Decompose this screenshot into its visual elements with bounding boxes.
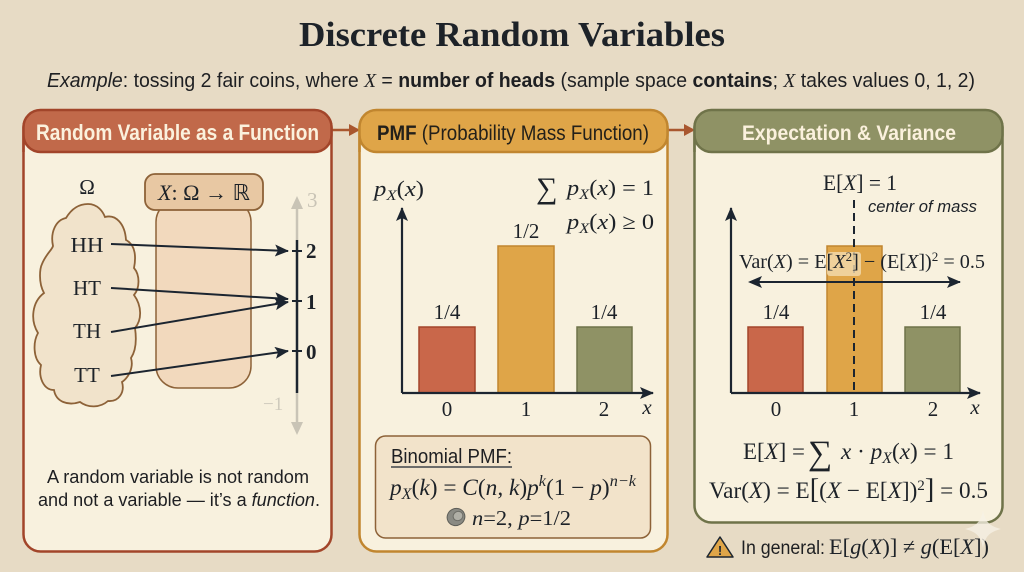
normalisation formulas: ( xyxy=(589,175,597,200)
variance definition formula: ] xyxy=(925,474,934,505)
panel: random variable as a function xyxy=(24,110,332,552)
number line: 0 xyxy=(306,340,316,364)
warning note: In general: xyxy=(741,538,825,559)
panel 1 header xyxy=(24,110,332,152)
expectation formula xyxy=(743,435,954,472)
arrow: panel 2 to panel 3 xyxy=(668,129,693,131)
outcome labels: HT xyxy=(73,276,101,300)
expectation formula: x) = 1 xyxy=(900,439,954,464)
sparkle watermark xyxy=(965,510,1001,548)
bar chart: distribution: 1 xyxy=(849,397,859,421)
bar chart: PMF xyxy=(402,208,653,421)
expectation formula: X xyxy=(881,450,893,467)
warning note xyxy=(707,534,989,559)
omega label: Ω xyxy=(79,175,95,199)
expectation formula: ∑ xyxy=(808,435,832,472)
y axis label: ( xyxy=(397,176,405,201)
binomial PMF box: ( xyxy=(412,475,419,500)
binomial PMF box: p xyxy=(390,475,402,500)
outcome labels xyxy=(70,233,104,387)
normalisation formulas: p xyxy=(567,209,578,234)
variance definition formula: = 0.5 xyxy=(940,478,988,503)
outcome labels: HH xyxy=(70,233,104,257)
caption: A random variable is not random xyxy=(47,467,309,487)
caption: and not a variable — it’s a function. xyxy=(38,490,320,510)
normalisation formulas: X xyxy=(578,221,590,237)
bar chart: PMF: 1/4 xyxy=(591,300,618,324)
y axis label: p xyxy=(374,176,385,201)
binomial PMF box: k) = C(n, k)p xyxy=(419,475,539,500)
function label: X: Ω → ℝ xyxy=(157,180,251,205)
panel: PMF xyxy=(360,110,668,552)
bar chart: distribution: 1/4 xyxy=(920,300,947,324)
function box xyxy=(156,200,251,388)
binomial PMF box: (1 − xyxy=(546,475,590,500)
warning note: E[g(X)] ≠ g(E[X]) xyxy=(829,534,989,559)
spread arrow xyxy=(750,281,960,283)
variance formula: X]) xyxy=(906,251,932,273)
bar chart: PMF: 1/4 xyxy=(434,300,461,324)
panel 3 header xyxy=(694,110,1002,152)
bar chart: PMF: 1 xyxy=(521,397,531,421)
binomial PMF box xyxy=(376,436,650,538)
normalisation formulas xyxy=(536,172,654,237)
bar chart: distribution xyxy=(731,200,980,421)
variance formula: 2 xyxy=(932,249,938,264)
outcome labels: TT xyxy=(74,363,100,387)
number line: −1 xyxy=(263,394,283,415)
normalisation formulas: p xyxy=(567,175,578,200)
panel 3 header: Expectation & Variance xyxy=(742,122,956,145)
binomial PMF box: n−k xyxy=(610,473,637,490)
variance formula: 2 xyxy=(846,249,852,264)
normalisation formulas: x) = 1 xyxy=(597,175,650,200)
bar chart: PMF: 1/2 xyxy=(513,219,539,243)
binomial PMF box: p) xyxy=(590,475,610,500)
variance formula: ] − (E[ xyxy=(852,251,906,273)
caption xyxy=(38,467,320,510)
bar chart: distribution: x xyxy=(969,395,980,419)
number line xyxy=(263,188,318,435)
bar chart: PMF: x xyxy=(641,395,652,419)
icon: warning triangle xyxy=(707,537,733,558)
subtitle: Example: tossing 2 fair coins, where X = number of heads (sample space contains; X takes values 0, 1, 2) xyxy=(47,70,975,92)
arrow: panel 1 to panel 2 xyxy=(332,129,358,131)
variance definition formula: 2 xyxy=(917,478,925,494)
bar chart: PMF: 2 xyxy=(599,397,609,421)
icon: warning triangle: ! xyxy=(718,543,722,558)
bar chart: distribution: 0 xyxy=(771,397,781,421)
binomial PMF box: X xyxy=(401,486,413,503)
bar chart: PMF: 0 xyxy=(442,397,452,421)
panel 2 header: PMF (Probability Mass Function) xyxy=(377,122,649,145)
title: Discrete Random Variables xyxy=(299,15,725,54)
variance definition formula: Var(X) = E[(X − E[X]) xyxy=(709,474,917,505)
panel 2 header xyxy=(360,110,668,152)
y axis label: X xyxy=(385,188,398,204)
outcome labels: TH xyxy=(73,319,101,343)
variance formula: = 0.5 xyxy=(938,251,985,273)
icon: coin xyxy=(444,505,468,529)
panel: expectation and variance xyxy=(694,110,1002,522)
number line: 1 xyxy=(306,290,316,314)
normalisation formulas: x) ≥ 0 xyxy=(597,209,650,234)
variance formula xyxy=(739,249,985,276)
expectation formula: ( xyxy=(892,439,900,464)
normalisation formulas: ( xyxy=(589,209,597,234)
expectation formula: x · p xyxy=(841,439,882,464)
binomial PMF box: k xyxy=(539,473,547,490)
expectation label: E[X] = 1 xyxy=(823,170,897,195)
number line: 2 xyxy=(306,239,316,263)
binomial PMF box: n=2, p=1/2 xyxy=(472,506,571,530)
panel 1 header: Random Variable as a Function xyxy=(36,120,319,145)
center of mass note: center of mass xyxy=(868,197,977,216)
bar chart: distribution: 1/4 xyxy=(763,300,790,324)
cloud: sample space xyxy=(33,204,140,406)
binomial PMF box: Binomial PMF: xyxy=(391,446,512,468)
bar chart: distribution: 2 xyxy=(928,397,938,421)
expectation formula: E[X] = xyxy=(743,439,805,464)
function label xyxy=(145,174,263,210)
normalisation formulas: ∑ xyxy=(536,172,557,205)
y axis label: x) xyxy=(405,176,423,201)
mapping arrows xyxy=(111,244,288,376)
normalisation formulas: X xyxy=(578,187,590,203)
variance formula: Var(X) = E[X xyxy=(739,251,845,273)
number line: 3 xyxy=(307,188,318,212)
